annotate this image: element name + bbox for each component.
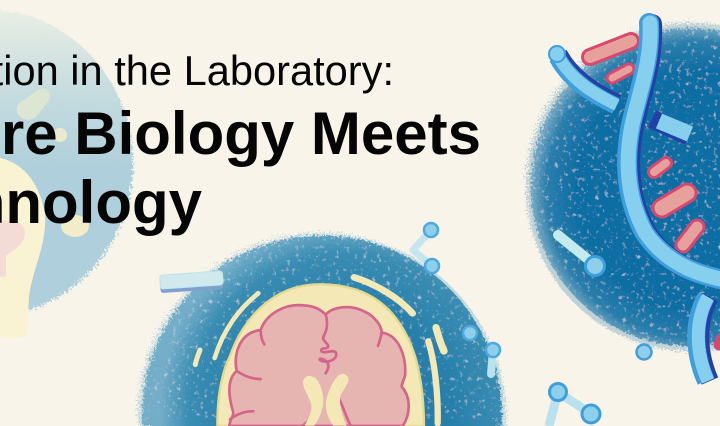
bulb pink filament [0, 221, 25, 277]
DNA main strand [627, 23, 720, 281]
ventricles [303, 374, 348, 425]
molecule sphere [636, 344, 652, 360]
molecule: bent stick with two spheres [413, 223, 439, 273]
molecule rod [160, 271, 224, 293]
brain folds [230, 314, 382, 426]
molecule: linked spheres [549, 384, 600, 426]
illustration: faded light bulb on pale blue blob [0, 9, 133, 338]
DNA fragment [652, 119, 690, 136]
bulb small yellow shapes [17, 89, 89, 237]
molecule: stick with sphere [558, 235, 604, 276]
title [0, 47, 481, 236]
molecule: sphere with stick [486, 343, 500, 374]
yellow accent strokes [195, 277, 444, 423]
molecule sphere [463, 326, 477, 340]
light bulb body [0, 158, 45, 338]
blob halo [138, 233, 506, 426]
brain [229, 305, 409, 426]
blue blob [142, 236, 502, 426]
DNA left strand [549, 46, 618, 106]
pale blue blob [0, 9, 133, 317]
illustration: DNA on blue blob [526, 23, 720, 426]
dark blue blob [531, 28, 720, 346]
illustration: brain on blue blob [138, 223, 506, 426]
pink base pairs [590, 41, 720, 345]
blob base strip [150, 419, 495, 426]
head outline [217, 284, 424, 426]
blob halo [526, 23, 720, 351]
brain drawing [195, 277, 444, 426]
DNA lower strand [696, 297, 710, 381]
